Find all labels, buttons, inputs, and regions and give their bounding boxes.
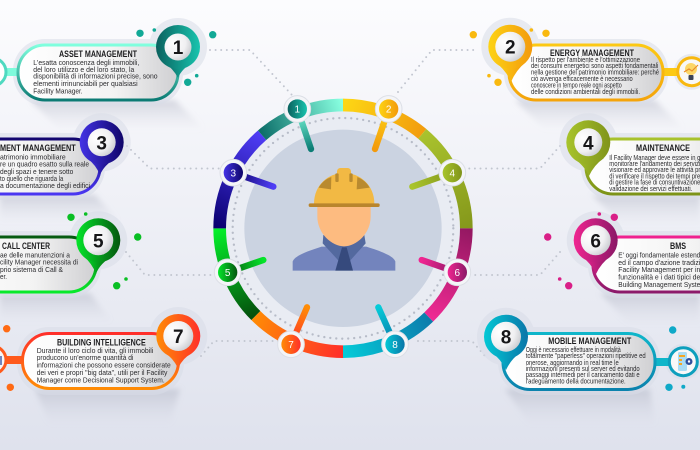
panel 4 body [609, 153, 700, 193]
panel 1 body: del loro utilizzo e del loro stato, la [33, 65, 135, 74]
panel 2 body: conoscere in tempo reale ogni aspetto [531, 80, 622, 90]
node 4 [439, 159, 466, 186]
panel 7 body: producono un'enorme quantità di [37, 353, 134, 362]
panel 3 body [0, 152, 90, 190]
panel 5 shadow [0, 293, 112, 322]
panel 1 left icon [0, 58, 18, 86]
panel 8 decorative dots [665, 326, 685, 391]
panel 5 number badge: 5 [93, 231, 104, 252]
panel 5: call center [0, 211, 141, 322]
panel 8 body: totalmente "paperless" operazioni ripetitive ed [526, 351, 646, 360]
panel 2 halo [481, 18, 700, 106]
panel 1 shadow [30, 100, 205, 130]
panel 5 body: ae delle manutenzioni a [0, 250, 71, 260]
panel 5 body [0, 250, 78, 281]
panel 3 body: a documentazione degli edifici [0, 181, 90, 190]
panel 4: maintenance [559, 113, 700, 225]
panel 1: asset management [0, 18, 216, 130]
panel 1 pill [18, 45, 178, 100]
panel 7 body: dei veri e propri "big data", utili per il Facility [37, 368, 168, 377]
panel 6 halo [567, 211, 700, 298]
panel 6 number badge: 6 [590, 231, 601, 252]
panel 8: mobile management [477, 308, 700, 425]
node 8: 8 [392, 340, 398, 351]
panel 7 body: Manager come Decisional Support System. [37, 376, 165, 384]
node 6: 6 [455, 268, 461, 279]
panel 2 shadow [515, 100, 685, 130]
panel 6 title: BMS [670, 241, 686, 251]
panel 4 shadow [592, 195, 700, 225]
panel 7 number badge [156, 314, 200, 368]
panel 3 halo [0, 113, 131, 200]
spokes [228, 109, 457, 344]
panel 6 decorative dots [544, 212, 618, 289]
panel 5 body: er. [0, 272, 7, 281]
panel 7 pill [22, 334, 178, 388]
panel 1 number badge: 1 [173, 38, 184, 59]
panel 6: BMS [544, 211, 700, 325]
panel 5 halo [0, 211, 127, 298]
panel 1 body: Facility Manager. [33, 86, 83, 95]
panel 1 number badge [156, 25, 200, 78]
panel 8 body: l'adeguamento della documentazione. [526, 376, 626, 386]
panel 3 shadow [0, 195, 120, 222]
node 3 [220, 159, 247, 186]
panel 2 pill [509, 45, 663, 100]
panel 8 body: Oggi è necessario effettuare in modalità [526, 345, 621, 354]
node 3: 3 [231, 168, 237, 179]
panel 5 body: prio sistema di Call & [0, 265, 63, 274]
panel 6 shadow [600, 293, 700, 325]
panel 2 body: delle condizioni ambientali degli immobili. [531, 87, 640, 96]
coloured ring [220, 105, 466, 352]
panel 2 decorative dots [470, 28, 550, 86]
panel 3: document management [0, 113, 131, 222]
panel 7 left icon [0, 346, 24, 374]
panel 7 body: Durante il loro ciclo di vita, gli immobili [37, 346, 154, 355]
node 2: 2 [386, 105, 392, 116]
panel 7 decorative dots [3, 325, 14, 391]
panel 4 halo [559, 113, 700, 200]
node 5: 5 [225, 268, 231, 279]
panel 3 title: MENT MANAGEMENT [0, 143, 76, 153]
panel 5 title: CALL CENTER [2, 241, 50, 251]
panel 2 body: dei consumi energetici sono aspetti fondamentali [531, 61, 659, 70]
panel 2 body [531, 55, 659, 96]
node 4: 4 [450, 168, 456, 179]
inner disc [244, 130, 442, 327]
panel 3 number badge [80, 120, 124, 175]
panel 7 shadow [35, 389, 180, 425]
panel 3 body: degli spazi e tenere sotto [0, 167, 73, 176]
panel 6 pill [593, 237, 700, 292]
panel 3 body: atrimonio immobiliare [0, 152, 66, 162]
node 7: 7 [288, 340, 294, 351]
panel 7 title: BUILDING INTELLIGENCE [57, 337, 146, 347]
dotted connector lines [126, 50, 560, 356]
panel 2: energy management [470, 18, 700, 130]
panel 2 right icon: light bulb and chart [660, 58, 700, 86]
wheel inner band [226, 111, 460, 346]
panel 8 number badge: 8 [501, 328, 511, 349]
panel 2 body: ciò avvenga efficacemente è necessario [531, 74, 633, 83]
panel 1 body: disponibilità di informazioni precise, sono [33, 72, 158, 81]
node 8 [382, 331, 408, 358]
panel 7 body [37, 346, 171, 384]
panel 3 body: re un quadro esatto sulla reale [0, 160, 89, 168]
panel 3 body: to quello che riguarda la [0, 174, 64, 183]
dotted ring [233, 118, 453, 339]
panel 8 halo [477, 308, 700, 395]
node 7 [278, 331, 304, 358]
node 5 [214, 259, 241, 286]
node 2 [375, 96, 402, 122]
panel 5 number badge [76, 218, 120, 274]
panel 4 pill [586, 139, 700, 194]
icon: worker with hard hat [293, 168, 395, 271]
panel 3 number badge: 3 [96, 133, 107, 154]
panel 1 decorative dots [136, 28, 216, 86]
node 6 [444, 259, 471, 286]
node 1 [284, 96, 311, 122]
panel 1 body: elementi irrinunciabili per qualsiasi [33, 79, 138, 88]
panel 2 body: nella gestione del patrimonio immobiliare: perché [531, 68, 659, 76]
panel 2 number badge: 2 [505, 38, 516, 59]
node 1: 1 [295, 105, 301, 116]
panel 3 pill [0, 139, 100, 194]
panel 8 body: passaggi intermedi per il caricamento dati e [526, 370, 640, 379]
panel 8 shadow [505, 389, 655, 425]
panel 2 number badge [488, 25, 532, 82]
panel 8 body: informazioni presenti sul server ed evitando [526, 364, 640, 373]
panel 8 number badge [484, 315, 528, 370]
panel 5 pill [0, 237, 96, 292]
panel 1 title: ASSET MANAGEMENT [59, 49, 137, 59]
panel 2 title: ENERGY MANAGEMENT [550, 48, 634, 58]
panel 2 body: Il rispetto per l'ambiente e l'ottimizzazione [531, 55, 640, 64]
panel 5 body: cility Manager necessita di [0, 258, 78, 266]
panel 4 number badge: 4 [583, 133, 594, 154]
central wheel [214, 96, 471, 358]
panel 5 decorative dots [67, 212, 141, 289]
panel 8 body: onerose, aggiornando in real time le [526, 358, 619, 367]
panel 7 halo [17, 307, 207, 395]
panel 8 pill [503, 334, 655, 390]
panel 8 title: MOBILE MANAGEMENT [548, 336, 632, 346]
panel 1 body [33, 58, 158, 95]
panel 7: building intelligence [0, 307, 207, 425]
panel 4 number badge [566, 120, 610, 176]
panel 6 number badge [574, 218, 618, 274]
panel 7 body: informazioni che possono essere considerate [37, 360, 171, 370]
panel 7 number badge: 7 [173, 327, 184, 348]
panel 1 halo [13, 18, 207, 106]
panel 6 body [618, 250, 700, 289]
panel 1 body: L'esatta conoscenza degli immobili, [33, 58, 139, 67]
panel 8 right icon: phone with gear [654, 348, 697, 376]
panel 8 body [526, 345, 646, 386]
